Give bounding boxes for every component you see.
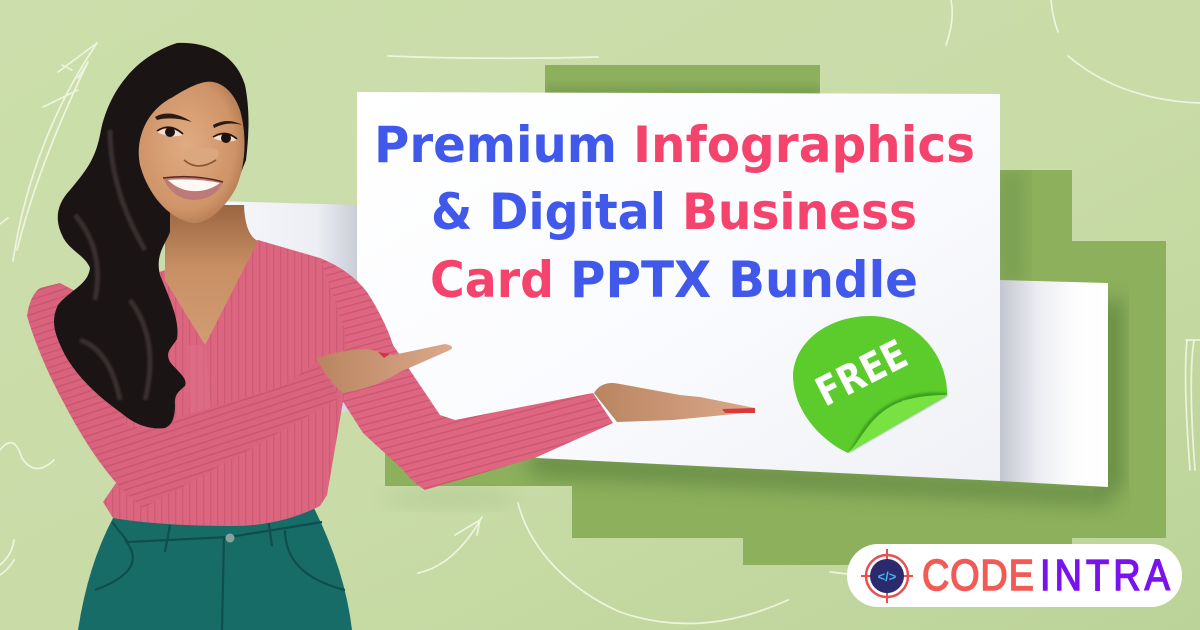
eyes [157, 127, 237, 143]
heading line 2: Business [682, 183, 917, 241]
heading line 2: & Digital [431, 183, 666, 241]
free label: FREE [809, 331, 915, 416]
button placket [188, 345, 212, 430]
neck and chest [165, 205, 258, 345]
heading line 2 [431, 183, 917, 241]
heading line 3: Card [430, 251, 554, 309]
heading line 1 [374, 116, 975, 174]
back paper: right flap [1000, 280, 1108, 487]
near nail [378, 352, 390, 358]
far hand [594, 383, 755, 422]
logo wordmark [922, 550, 1170, 600]
heading line 1: Infographics [633, 116, 975, 174]
eyebrows [155, 113, 242, 128]
heading line 1: Premium [374, 116, 617, 174]
near hand [317, 344, 452, 393]
heading [374, 116, 975, 309]
near arm sleeve [27, 283, 340, 508]
nose [182, 148, 219, 168]
woman presenting [27, 43, 755, 630]
face [139, 82, 245, 223]
back paper: left flap [213, 201, 358, 412]
far arm sleeve [320, 258, 613, 490]
free sticker [793, 316, 947, 453]
trousers [78, 506, 352, 630]
torso [100, 240, 345, 526]
heading line 3: PPTX Bundle [570, 251, 918, 309]
main paper [357, 92, 1000, 481]
logo target icon: </> [878, 569, 897, 584]
brand logo pill [847, 544, 1182, 607]
logo target icon [861, 549, 913, 603]
heading line 3 [430, 251, 918, 309]
hair [54, 43, 248, 428]
shadow under far arm [380, 489, 520, 507]
logo wordmark: CODE [922, 550, 1034, 600]
nails on far hand [722, 408, 755, 413]
logo wordmark: INTRA [1040, 550, 1170, 600]
green backdrop blocks [385, 65, 1166, 565]
smile [163, 177, 223, 200]
